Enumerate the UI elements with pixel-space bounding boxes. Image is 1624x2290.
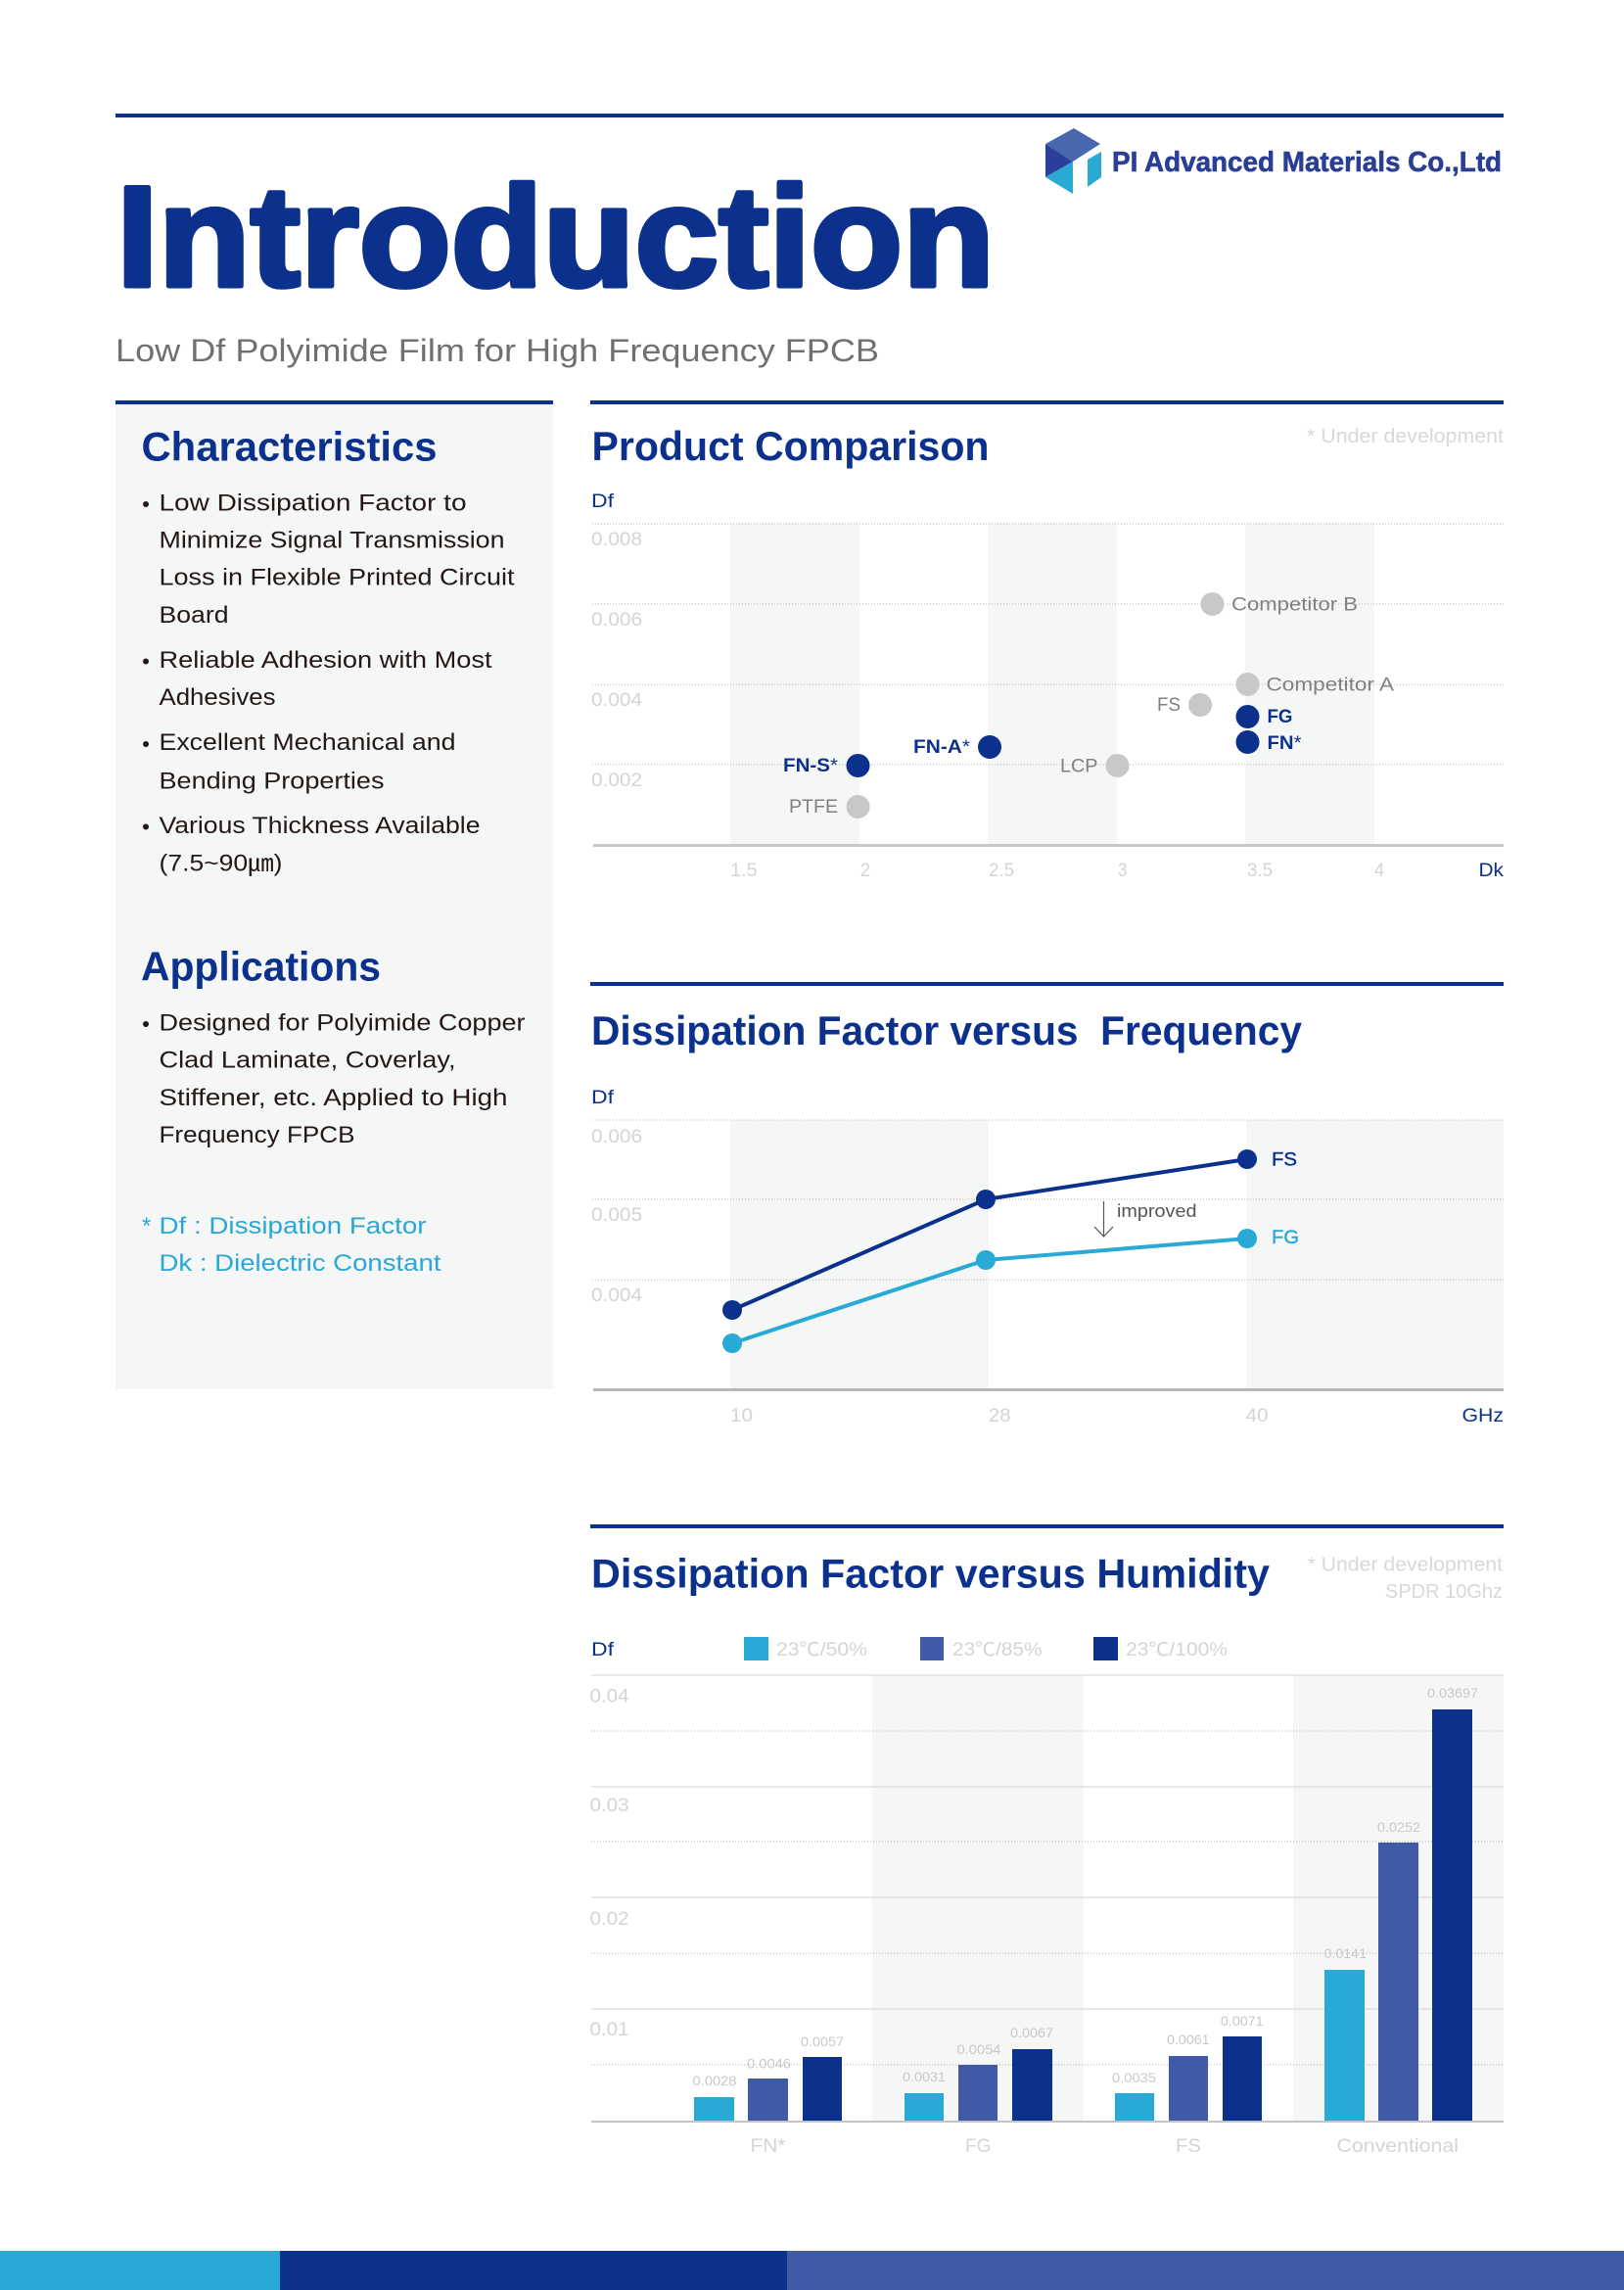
bars: FS: [1115, 2036, 1262, 2121]
value labels: 0.0031: [903, 2069, 946, 2084]
panel: dissipation factor versus humidity: [589, 1524, 1504, 2157]
x axis labels: GHz: [1462, 1406, 1504, 1426]
y axis labels: 0.006: [591, 1127, 642, 1147]
logo wordmark: PI Advanced Materials Co.,Ltd: [1112, 147, 1502, 178]
category labels: FS: [1176, 2136, 1201, 2157]
legend: [744, 1637, 1228, 1660]
list: applications: Designed for Polyimide Copper: [159, 1010, 526, 1036]
data labels: Competitor A: [1267, 676, 1394, 695]
legend: 23℃/85%: [952, 1640, 1043, 1660]
footnote: abbreviations: Dk : Dielectric Constant: [159, 1250, 441, 1277]
value labels: 0.0067: [1010, 2025, 1053, 2040]
y axis title: Df: [591, 1088, 615, 1108]
icon: hexagon logo mark: [1045, 128, 1101, 194]
series: FG: [722, 1229, 1257, 1353]
heading: product comparison: Product Comparison: [591, 423, 989, 469]
value labels: 0.03697: [1427, 1685, 1478, 1701]
bars: FN: [694, 2057, 842, 2121]
data labels: LCP: [1060, 756, 1098, 777]
data labels: FN-S*: [783, 756, 839, 776]
note: test conditions: [1308, 1555, 1503, 1603]
x axis labels: 2.5: [989, 861, 1014, 881]
x axis labels: [730, 861, 1505, 881]
data labels: Competitor B: [1231, 595, 1358, 615]
series label: FG: FG: [1272, 1228, 1299, 1248]
list: characteristics: Loss in Flexible Printed Circuit: [159, 564, 515, 591]
list: characteristics: (7.5~90㎛): [159, 850, 282, 877]
footnote: abbreviations: Df : Dissipation Factor: [159, 1213, 427, 1239]
category labels: Conventional: [1337, 2136, 1459, 2157]
legend: 23℃/100%: [1126, 1640, 1228, 1660]
x axis labels: Dk: [1478, 861, 1505, 881]
subtitle: Low Df Polyimide Film for High Frequency FPCB: [116, 333, 879, 368]
list: characteristics: Adhesives: [159, 684, 276, 711]
y axis labels: 0.006: [591, 610, 642, 631]
data points: PI products: [846, 705, 1259, 777]
y axis labels: 0.02: [589, 1909, 628, 1930]
logo: [1045, 128, 1502, 194]
note: test conditions: SPDR 10Ghz: [1385, 1581, 1503, 1603]
x axis labels: 2: [860, 861, 870, 881]
bar chart: [589, 1675, 1504, 2157]
footer colour band: [0, 2251, 1624, 2290]
value labels: 0.0054: [957, 2041, 1001, 2057]
category labels: FN*: [750, 2136, 786, 2157]
arrow: improved: [1094, 1201, 1113, 1237]
value labels: 0.0057: [801, 2033, 844, 2049]
y axis labels: 0.004: [591, 690, 642, 711]
x axis labels: 3.5: [1247, 861, 1273, 881]
heading: humidity: Dissipation Factor versus Humidity: [591, 1551, 1271, 1596]
value labels: 0.0035: [1112, 2070, 1156, 2085]
category labels: [750, 2136, 1459, 2157]
y axis labels: [591, 1127, 642, 1306]
list: applications: Stiffener, etc. Applied to High: [159, 1085, 507, 1111]
title: Introduction: [116, 157, 995, 316]
category labels: FG: [965, 2136, 991, 2157]
list: characteristics: Board: [159, 602, 229, 629]
data points: competitors: [846, 592, 1259, 818]
panel: characteristics and applications: [116, 400, 553, 1389]
note: under development: * Under development: [1307, 426, 1504, 447]
heading: frequency: Dissipation Factor versus Frequency: [591, 1007, 1303, 1053]
heading: applications: Applications: [141, 944, 381, 989]
annotation: improved: improved: [1117, 1201, 1196, 1221]
y axis labels: 0.002: [591, 771, 642, 791]
value labels: 0.0028: [693, 2073, 737, 2088]
data labels: [783, 595, 1394, 818]
list: characteristics: Excellent Mechanical and: [159, 729, 456, 756]
value labels: 0.0252: [1377, 1819, 1420, 1835]
value labels: 0.0046: [747, 2056, 791, 2072]
value labels: [693, 1685, 1478, 2088]
x axis labels: 4: [1374, 861, 1384, 881]
line chart: [591, 1088, 1504, 1426]
footnote: abbreviations: *: [142, 1213, 151, 1239]
list: characteristics: Low Dissipation Factor to: [159, 490, 466, 517]
heading: characteristics: Characteristics: [141, 423, 437, 470]
value labels: 0.0141: [1323, 1945, 1367, 1961]
series: FS: [722, 1149, 1257, 1320]
x axis labels: 10: [730, 1406, 753, 1426]
x axis labels: 28: [989, 1406, 1010, 1426]
y axis title: Df: [591, 1640, 615, 1660]
data labels: FN*: [1267, 733, 1302, 754]
y axis labels: 0.004: [591, 1285, 642, 1306]
y axis labels: 0.005: [591, 1205, 642, 1226]
list: applications: Clad Laminate, Coverlay,: [159, 1048, 456, 1073]
legend: 23℃/50%: [776, 1640, 867, 1660]
y axis title: Df: [591, 491, 615, 512]
list: applications: Frequency FPCB: [159, 1122, 354, 1148]
list: characteristics: [143, 490, 515, 877]
bars: conventional: [1324, 1709, 1472, 2121]
data labels: FS: [1157, 695, 1181, 716]
panel: product comparison: [590, 400, 1505, 881]
note: test conditions: * Under development: [1308, 1555, 1503, 1576]
list: characteristics: Reliable Adhesion with Most: [159, 647, 492, 674]
list: characteristics: Minimize Signal Transmission: [159, 527, 505, 554]
bars: FG: [905, 2049, 1052, 2121]
list: applications: [143, 1010, 526, 1148]
data labels: FN-A*: [913, 737, 971, 758]
data labels: FG: [1267, 707, 1292, 727]
header: [116, 114, 1504, 368]
y axis labels: 0.03: [589, 1796, 628, 1816]
value labels: 0.0071: [1221, 2013, 1264, 2029]
y axis labels: [591, 530, 642, 791]
y axis labels: 0.01: [589, 2020, 628, 2040]
data labels: PTFE: [789, 797, 838, 818]
x axis labels: [730, 1406, 1504, 1426]
y axis labels: 0.008: [591, 530, 642, 550]
x axis labels: 1.5: [730, 861, 758, 881]
panel: dissipation factor versus frequency: [590, 982, 1504, 1426]
list: characteristics: Various Thickness Available: [159, 813, 480, 839]
series label: FS: FS: [1272, 1149, 1297, 1171]
scatter chart: [591, 491, 1505, 881]
value labels: 0.0061: [1167, 2032, 1210, 2047]
y axis labels: 0.04: [589, 1686, 629, 1707]
x axis labels: 3: [1118, 861, 1128, 881]
list: characteristics: Bending Properties: [159, 768, 384, 795]
x axis labels: 40: [1245, 1406, 1269, 1426]
y axis labels: [589, 1686, 629, 2040]
footnote: abbreviations: [142, 1213, 441, 1277]
